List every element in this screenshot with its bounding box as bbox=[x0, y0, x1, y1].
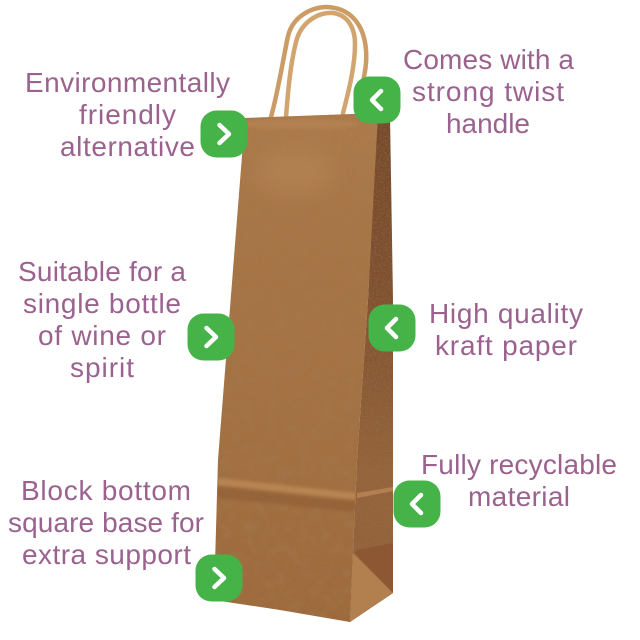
icon: right arrow button, single bottle bbox=[188, 314, 234, 360]
callout: environmentally friendly alternative: Environmentally bbox=[25, 67, 230, 98]
callout: single bottle: single bottle bbox=[23, 288, 181, 319]
callout: recyclable: Fully recyclable bbox=[421, 449, 617, 480]
side panel bbox=[350, 114, 393, 622]
callout: kraft paper: High quality bbox=[429, 298, 583, 329]
callout: recyclable bbox=[421, 449, 617, 512]
icon: left arrow button, handle bbox=[354, 76, 400, 124]
side crease bbox=[357, 487, 393, 498]
callout: block bottom: square base for bbox=[8, 507, 204, 538]
callout: single bottle: Suitable for a bbox=[18, 256, 186, 287]
callout: environmentally friendly alternative: alternative bbox=[60, 131, 195, 162]
callout: block bottom: extra support bbox=[22, 539, 191, 570]
callout: block bottom bbox=[8, 475, 204, 570]
icon: right arrow button, block bottom bbox=[196, 554, 242, 602]
paper bag bbox=[210, 7, 393, 625]
callout: single bottle bbox=[18, 256, 186, 383]
callout: environmentally friendly alternative: friendly bbox=[79, 99, 176, 130]
callout: strong twist handle: Comes with a bbox=[403, 44, 574, 75]
callout: strong twist handle: handle bbox=[446, 108, 530, 139]
twist handles bbox=[271, 7, 366, 117]
front panel bbox=[214, 113, 378, 622]
icon: left arrow button, recyclable bbox=[394, 480, 440, 528]
callout: recyclable: material bbox=[468, 481, 570, 512]
callout: single bottle: spirit bbox=[70, 352, 134, 383]
icon: left arrow button, kraft paper bbox=[368, 304, 416, 352]
bottom fold triangle bbox=[350, 553, 393, 622]
callout: single bottle: of wine or bbox=[38, 320, 166, 351]
callout: kraft paper bbox=[429, 298, 583, 361]
callout: strong twist handle: strong twist bbox=[412, 76, 564, 107]
callout: strong twist handle bbox=[403, 44, 574, 139]
front panel shading bbox=[215, 116, 356, 618]
callout: kraft paper: kraft paper bbox=[435, 330, 577, 361]
icon: right arrow button, environmentally friendly bbox=[200, 110, 248, 158]
callout: block bottom: Block bottom bbox=[21, 475, 191, 506]
callout: environmentally friendly alternative bbox=[25, 67, 230, 162]
